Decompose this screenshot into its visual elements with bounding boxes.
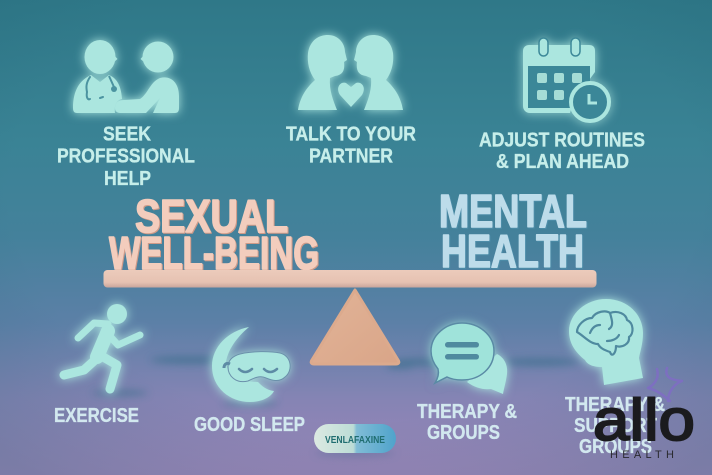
heading: sexual well-being: SEXUAL: [135, 190, 288, 242]
logo subtitle: HEALTH: [610, 449, 674, 461]
label: therapy and support groups: GROUPS: [579, 436, 652, 458]
label: talk to your partner: PARTNER: [309, 146, 393, 168]
label: adjust routines and plan ahead: ADJUST ROUTINES: [479, 130, 645, 152]
icon: calendar with clock: [523, 38, 609, 121]
label: therapy and groups: THERAPY &: [417, 401, 517, 423]
balance scale: [104, 270, 596, 364]
icon: moon and sleep mask: [212, 327, 290, 402]
label: therapy and groups: GROUPS: [427, 422, 500, 444]
heading: sexual well-being: WELL-BEING: [109, 227, 319, 279]
scale fulcrum: [311, 290, 399, 364]
icon: chat bubbles: [431, 323, 507, 394]
label: good sleep: GOOD SLEEP: [194, 414, 305, 436]
heading: mental health: [439, 185, 587, 277]
heading: mental health: HEALTH: [441, 225, 584, 277]
label: seek professional help: SEEK: [103, 124, 151, 146]
icon: doctor and patient: [73, 40, 179, 113]
icon: runner: [64, 304, 140, 389]
label: adjust routines and plan ahead: [479, 130, 645, 173]
logo wordmark: allo: [593, 388, 695, 453]
heading: sexual well-being: [109, 190, 319, 279]
label: exercise: EXERCISE: [54, 405, 139, 427]
label: talk to your partner: [286, 124, 416, 168]
logo star: [648, 368, 682, 401]
label: therapy and groups: [417, 401, 517, 444]
logo: allo health: [593, 368, 695, 461]
heading: mental health: MENTAL: [439, 185, 587, 237]
icon: couple with heart: [298, 35, 403, 110]
label: therapy and support groups: [565, 394, 665, 458]
icon: head with brain: [569, 299, 643, 385]
label: therapy and support groups: THERAPY &: [565, 394, 665, 416]
pill: venlafaxine: [314, 424, 396, 457]
pill: venlafaxine: VENLAFAXINE: [325, 434, 385, 446]
label: talk to your partner: TALK TO YOUR: [286, 124, 416, 146]
label: seek professional help: PROFESSIONAL: [57, 146, 195, 168]
label: therapy and support groups: SUPPORT: [574, 415, 657, 437]
label: adjust routines and plan ahead: & PLAN AHEAD: [496, 151, 629, 173]
label: seek professional help: HELP: [104, 168, 151, 190]
label: seek professional help: [57, 124, 195, 190]
scale beam: [104, 270, 596, 288]
floor shadows: [92, 356, 580, 406]
